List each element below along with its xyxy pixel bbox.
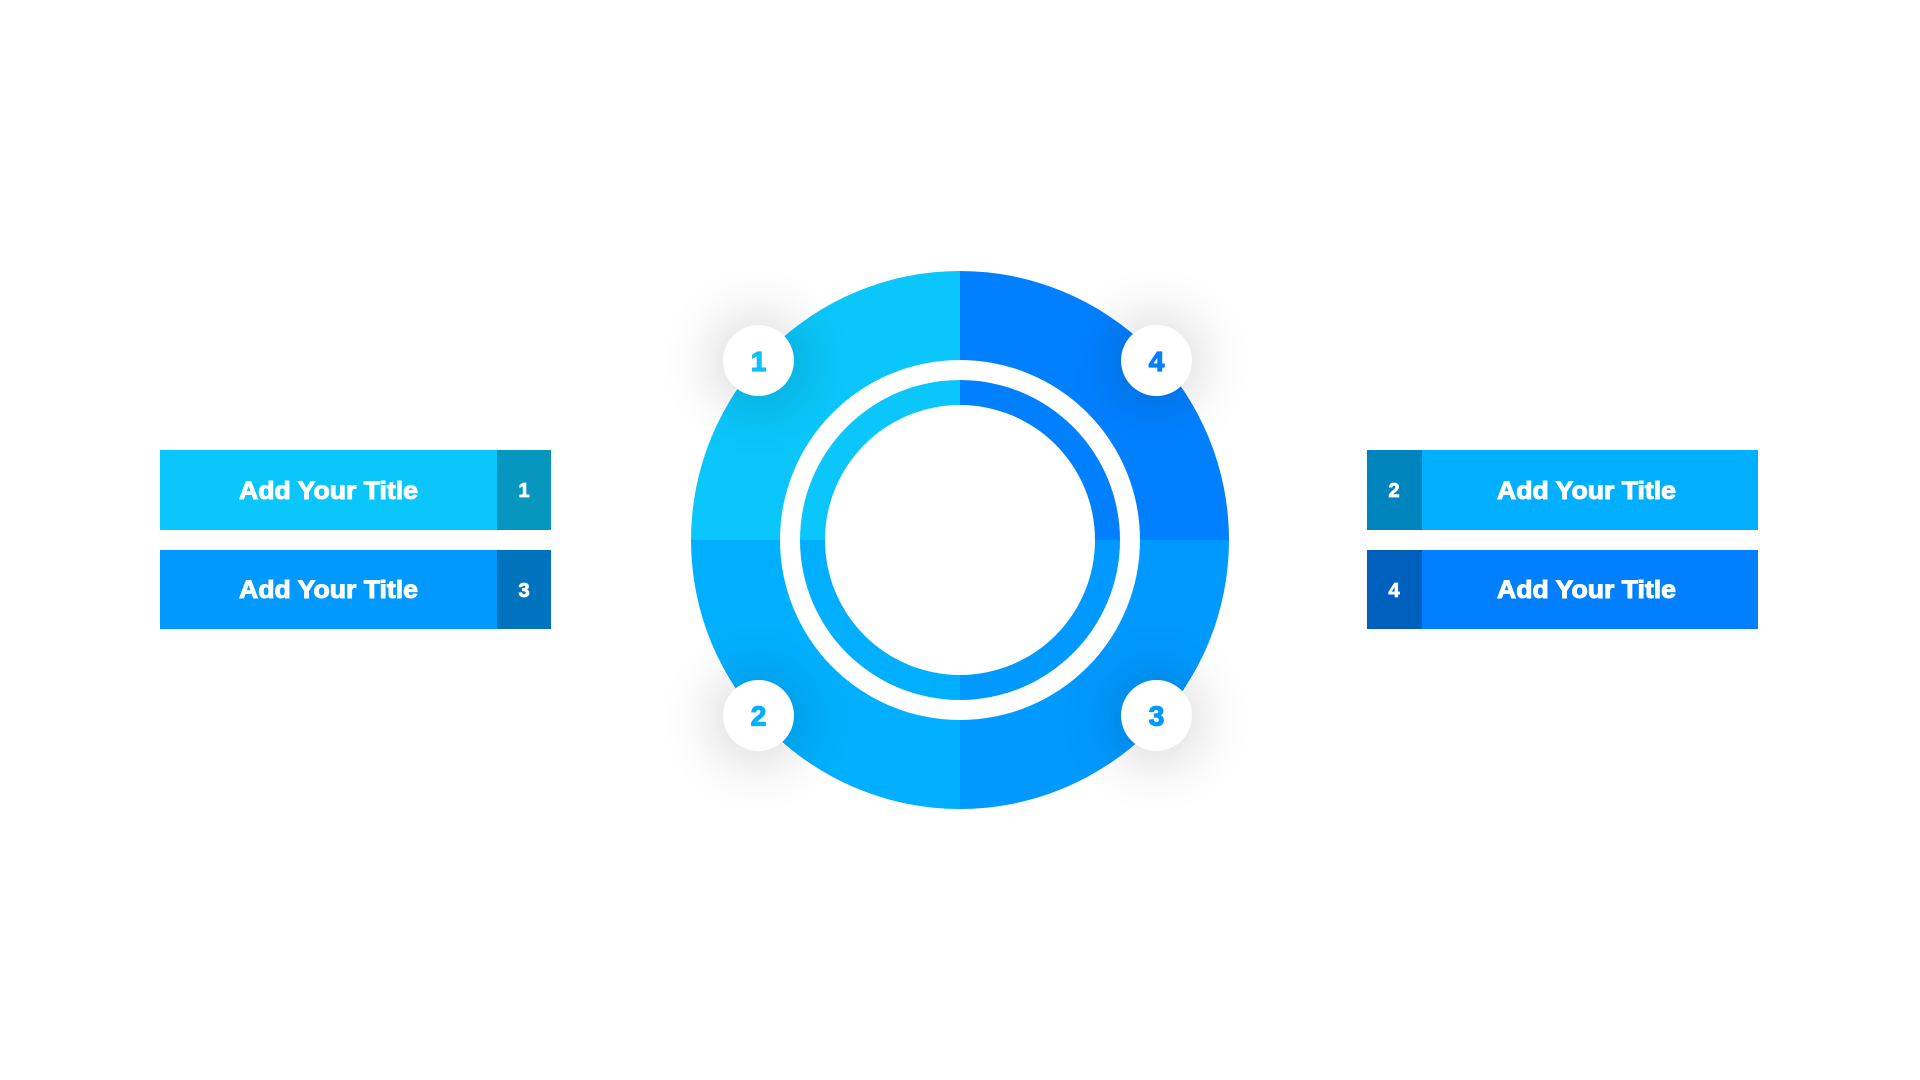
segment 1: top left <box>691 271 960 540</box>
marker 1: 1 <box>751 346 766 377</box>
title bar 3: Add Your Title <box>239 576 418 604</box>
marker 4: 4 <box>1149 346 1165 377</box>
title bar 4: Add Your Title <box>1497 576 1676 604</box>
segment 3: bottom right <box>960 540 1229 809</box>
title bar 1: 1 <box>518 480 530 502</box>
marker shadows <box>712 316 1202 764</box>
title bar 3: 3 <box>518 580 530 602</box>
title bar 4: 4 <box>1388 580 1400 602</box>
title bar 2 <box>1367 450 1758 530</box>
marker 2: 2 <box>751 700 766 732</box>
marker 4 <box>1121 325 1192 396</box>
segment 4: top right <box>960 271 1229 540</box>
panel: left title bars <box>160 450 551 629</box>
marker 1 <box>723 325 794 396</box>
marker 3 <box>1121 680 1192 751</box>
title bar 2: Add Your Title <box>1497 477 1676 505</box>
marker 2 <box>723 680 794 751</box>
panel: right title bars <box>1367 450 1758 629</box>
marker 3: 3 <box>1149 700 1164 732</box>
segment 2: bottom left <box>691 540 960 809</box>
title bar 1 <box>160 450 551 530</box>
chart: segmented ring diagram <box>691 271 1229 809</box>
title bar 1: Add Your Title <box>239 477 418 505</box>
title bar 3 <box>160 550 551 629</box>
title bar 2: 2 <box>1388 480 1400 502</box>
title bar 4 <box>1367 550 1758 629</box>
